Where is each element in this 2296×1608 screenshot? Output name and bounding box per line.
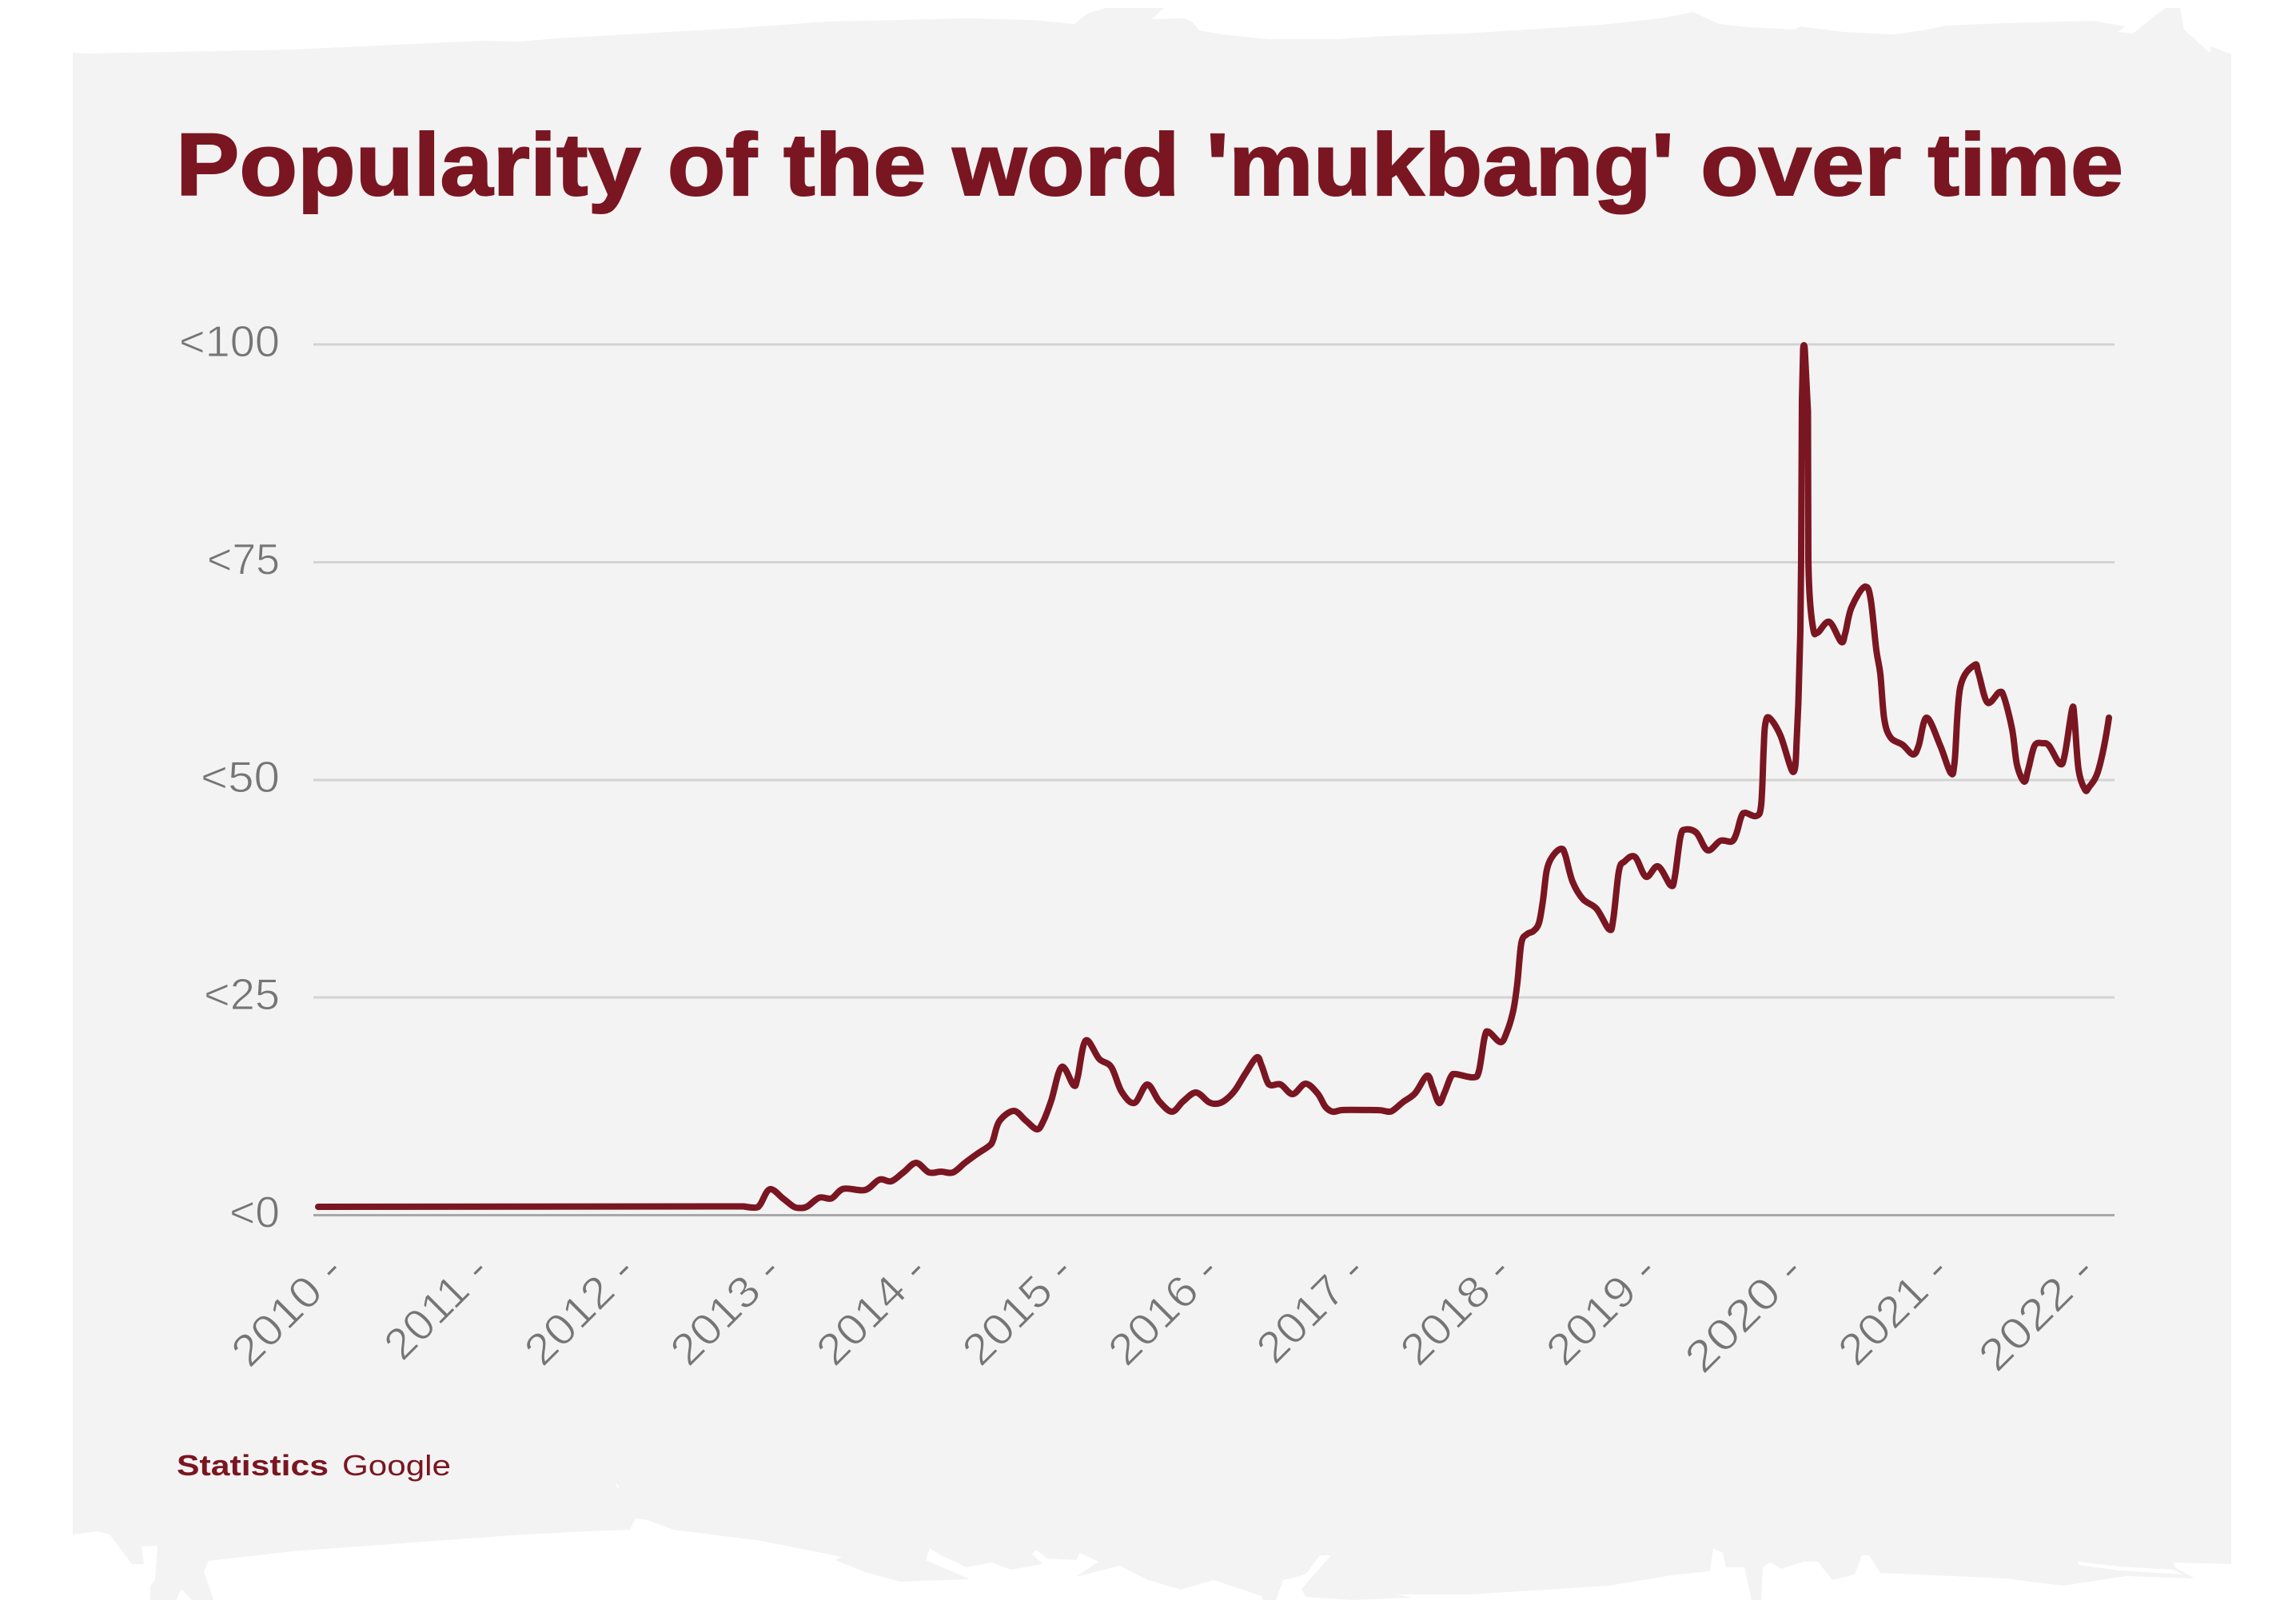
x axis labels: 2014 -	[807, 1245, 936, 1375]
x axis labels: 2012 -	[515, 1245, 644, 1375]
y axis labels	[179, 316, 280, 1237]
line chart	[179, 316, 2115, 1382]
x axis labels: 2020 -	[1675, 1245, 1812, 1382]
y axis labels: <50	[201, 752, 280, 802]
x axis labels	[221, 1245, 2104, 1382]
source note	[177, 1449, 451, 1482]
x axis labels: 2011 -	[374, 1245, 499, 1369]
x axis labels: 2013 -	[660, 1245, 791, 1375]
source name: Google	[342, 1449, 451, 1482]
x axis labels: 2018 -	[1390, 1245, 1521, 1375]
y axis labels: <75	[207, 534, 280, 583]
x axis labels: 2016 -	[1098, 1245, 1229, 1375]
data line: search popularity	[318, 345, 2109, 1208]
y axis labels: <0	[229, 1188, 280, 1237]
x axis labels: 2022 -	[1968, 1245, 2104, 1380]
gridlines	[313, 344, 2115, 1215]
x axis labels: 2021 -	[1828, 1245, 1959, 1375]
y axis labels: <100	[179, 316, 280, 366]
x axis labels: 2015 -	[952, 1245, 1082, 1375]
x axis labels: 2010 -	[221, 1245, 353, 1376]
x axis labels: 2019 -	[1537, 1245, 1666, 1375]
x axis labels: 2017 -	[1246, 1245, 1374, 1372]
title: Popularity of the word 'mukbang' over time	[176, 116, 2123, 214]
y axis labels: <25	[204, 969, 280, 1019]
source label: Statistics	[177, 1449, 329, 1482]
